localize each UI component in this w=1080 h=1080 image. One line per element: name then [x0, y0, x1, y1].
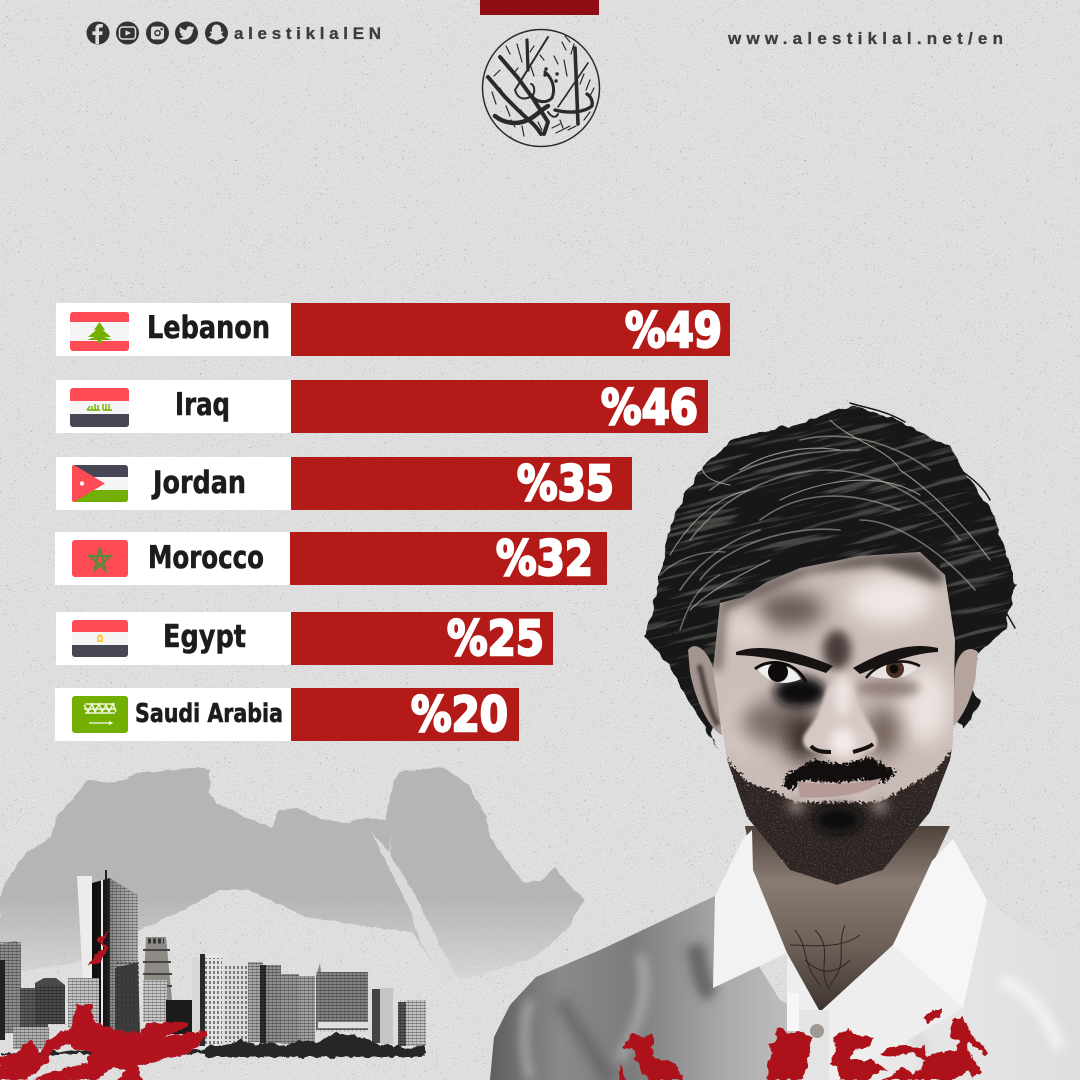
handle text: alestiklalEN [234, 24, 381, 43]
shirt torso [490, 896, 1080, 1080]
man with angry face [490, 334, 1080, 1080]
row: Iraq [56, 380, 708, 436]
left cluster buildings [0, 941, 21, 1033]
chest hair [790, 925, 860, 990]
shirt button [810, 1024, 824, 1038]
bar: Lebanon 49 percent [291, 303, 730, 356]
ears [688, 646, 978, 735]
label: Egypt: Egypt [163, 619, 246, 655]
central cluster buildings [192, 958, 202, 1046]
leaning stone tower [143, 937, 172, 1000]
row: Egypt [56, 611, 553, 667]
map silhouette of the Arab world [0, 767, 584, 985]
value: 20 percent: %20 [411, 687, 508, 743]
eye left [755, 662, 806, 683]
eyebrows [736, 646, 938, 674]
bar: Iraq 46 percent [291, 380, 708, 433]
icon: facebook [86, 22, 110, 44]
hair strands [644, 402, 1017, 711]
logo emblem: round calligraphic seal [482, 30, 600, 146]
value: 46 percent: %46 [601, 380, 698, 436]
pale tower behind [77, 876, 92, 1000]
icon: Lebanon flag [70, 312, 129, 351]
website url: www.alestiklal.net/en [727, 29, 1003, 48]
value: 49 percent: %49 [625, 303, 722, 359]
bar: Morocco 32 percent [290, 532, 607, 585]
label: Iraq: Iraq [175, 387, 230, 423]
icon: Iraq flag [70, 388, 129, 427]
row: Jordan [56, 456, 632, 512]
icon: youtube [116, 22, 139, 44]
hair silhouette [645, 405, 1015, 751]
top red tab [480, 0, 599, 15]
face shading [713, 552, 960, 890]
label: Morocco: Morocco [148, 540, 264, 576]
shirt placket [787, 945, 963, 1080]
collar left [713, 830, 787, 988]
bar: Saudi Arabia 20 percent [291, 688, 519, 741]
city skyline [0, 870, 426, 1057]
nose [803, 673, 877, 761]
beard stubble [725, 745, 955, 888]
value: 32 percent: %32 [496, 531, 593, 587]
face base [713, 552, 955, 885]
row: Lebanon [56, 303, 730, 359]
red splatter over the skyline [0, 930, 207, 1080]
social media handle row [86, 22, 381, 44]
icon: Saudi Arabia flag [72, 696, 128, 733]
trees and ground [0, 1032, 425, 1057]
collar right [893, 839, 987, 1008]
lips [797, 778, 881, 798]
bar: Jordan 35 percent [291, 457, 632, 510]
icon: snapchat [205, 22, 228, 44]
mustache [783, 757, 897, 790]
icon: twitter [175, 22, 198, 44]
row: Saudi Arabia [55, 687, 519, 743]
icon: instagram [146, 22, 169, 44]
label: Jordan: Jordan [151, 465, 246, 501]
bar: Egypt 25 percent [291, 612, 553, 665]
main tower [92, 870, 138, 1032]
red stains on shirt [620, 1010, 988, 1080]
shirt folds [524, 945, 1060, 1080]
value: 35 percent: %35 [517, 456, 614, 512]
icon: Morocco flag [72, 540, 128, 577]
bar chart: share by country [55, 303, 730, 743]
icon: Jordan flag [72, 465, 128, 502]
eye right [866, 660, 920, 679]
value: 25 percent: %25 [447, 611, 544, 667]
label: Lebanon: Lebanon [147, 310, 270, 346]
row: Morocco [55, 531, 607, 587]
icon: Egypt flag [72, 620, 128, 657]
neck [745, 826, 950, 1012]
label: Saudi Arabia: Saudi Arabia [135, 699, 283, 729]
